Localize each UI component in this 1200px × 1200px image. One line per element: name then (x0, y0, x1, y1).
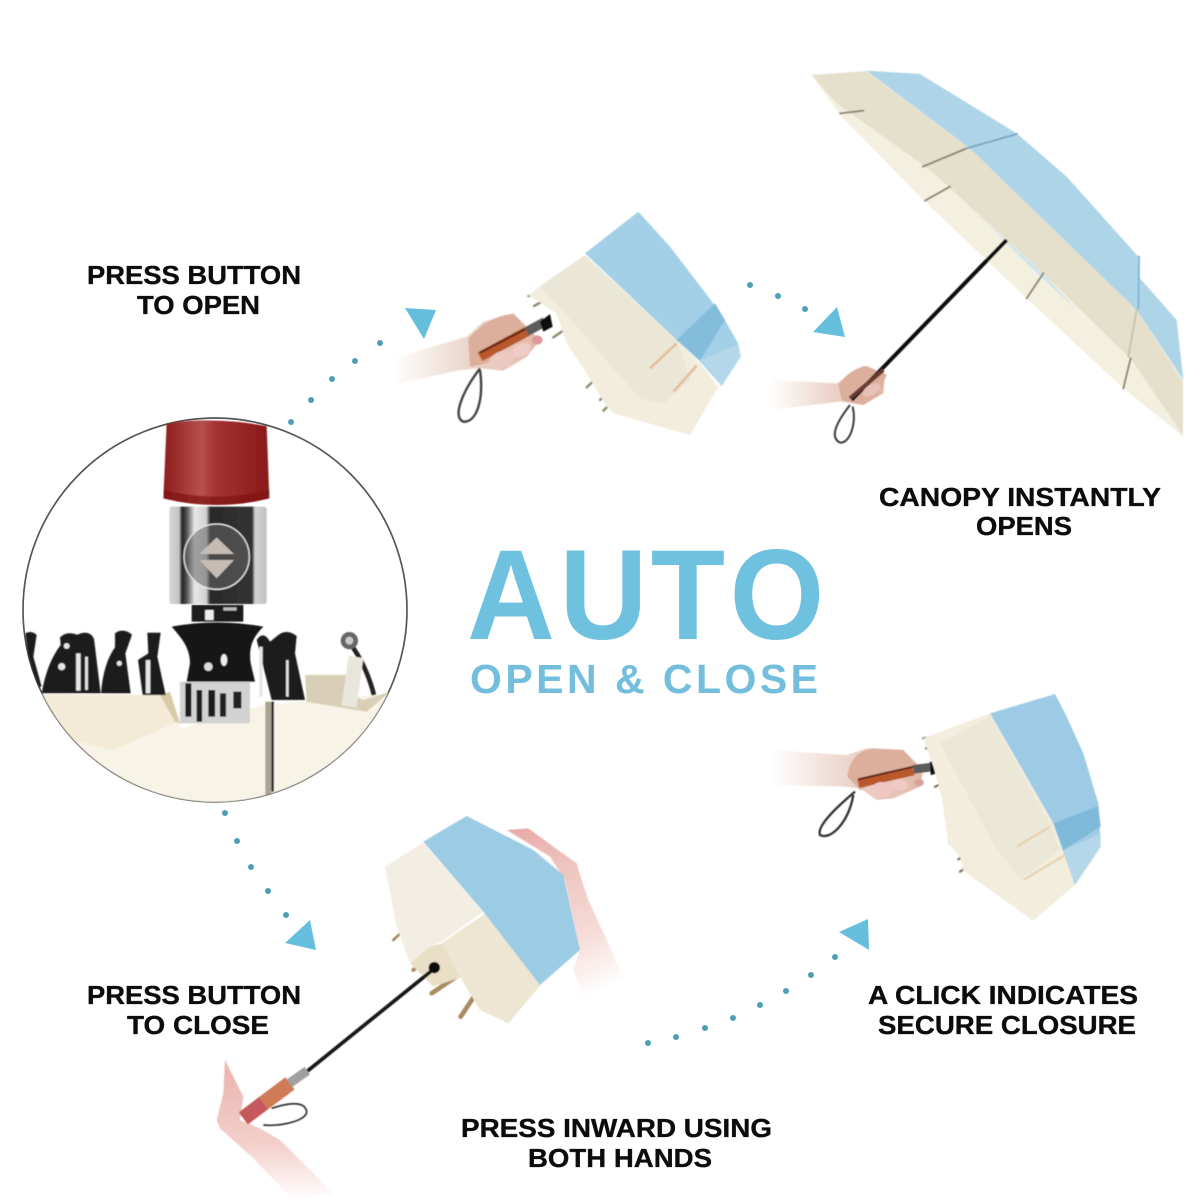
umbrella closing with both hands (217, 816, 627, 1200)
strap (459, 368, 481, 422)
metal button housing (169, 507, 267, 604)
fingers (871, 782, 892, 798)
arm and hand (770, 748, 923, 800)
dotted arrow: half-open to fully open (747, 282, 845, 337)
label: a click indicates secure closure: SECURE CLOSURE (878, 1010, 1136, 1040)
label: canopy instantly opens (879, 482, 1161, 541)
canopy cream (528, 255, 718, 435)
rib tips (528, 291, 617, 411)
canopy blue (423, 816, 580, 985)
canopy cream (923, 713, 1075, 921)
grip and fingers (850, 370, 883, 398)
left rib tips (25, 631, 305, 700)
dotted arrow: button to closing umbrella (222, 810, 316, 950)
arm and hand (393, 313, 540, 384)
label: a click indicates secure closure (868, 980, 1138, 1040)
label: press inward using both hands: PRESS INWARD USING (461, 1113, 772, 1143)
label: canopy instantly opens: CANOPY INSTANTLY (879, 482, 1161, 512)
canopy underside (410, 943, 463, 987)
rib seam (264, 701, 272, 796)
strap (820, 792, 855, 836)
ribs (393, 930, 478, 1017)
fingers (487, 347, 516, 371)
dotted arrow: button to half-open umbrella (288, 308, 436, 425)
circular close-up of handle and button (23, 418, 410, 810)
label: press button to open (87, 260, 301, 320)
black flared collar (172, 622, 263, 682)
label: canopy instantly opens: OPENS (976, 511, 1072, 541)
lens outline (23, 418, 407, 802)
red wooden handle (163, 420, 269, 505)
label: press button to close (87, 980, 301, 1040)
ribs (840, 111, 1139, 388)
canopy base (812, 72, 1183, 437)
cream canopy (42, 692, 388, 803)
dotted arrow: closing to secure closure (645, 919, 869, 1046)
heading: AUTO: AUTO (467, 524, 824, 667)
button (184, 524, 249, 589)
label: press button to close: TO CLOSE (127, 1010, 269, 1040)
fold lines (1017, 827, 1065, 880)
right rib (341, 632, 374, 707)
strap (835, 405, 854, 443)
canopy cream lower (442, 912, 541, 1023)
white rib highlights (58, 643, 289, 697)
half-open umbrella with hand (393, 212, 741, 435)
fully open umbrella with hand (770, 71, 1183, 443)
shaft (852, 240, 1007, 400)
fold lines (650, 343, 697, 392)
upper hand (507, 828, 627, 1018)
canopy cream upper (385, 843, 483, 963)
central mechanism (180, 682, 250, 723)
strap (263, 1104, 307, 1125)
arm and hand (770, 366, 885, 410)
canopy inner band (812, 71, 1183, 435)
subheading: OPEN & CLOSE: OPEN & CLOSE (470, 656, 818, 702)
handle (480, 332, 527, 357)
secure closure umbrella with hand (770, 694, 1101, 921)
blue band (867, 71, 1183, 380)
shaft (307, 967, 437, 1072)
handle (858, 771, 913, 783)
blue sliver under (957, 197, 1075, 308)
rib tips (923, 737, 982, 872)
handle (243, 1083, 290, 1118)
label: press inward using both hands: BOTH HANDS (528, 1143, 712, 1173)
lower hand (217, 1060, 333, 1200)
label: press button to close: PRESS BUTTON (87, 980, 301, 1010)
canopy blue (585, 212, 741, 386)
label: press inward using both hands (461, 1113, 772, 1173)
label: a click indicates secure closure: A CLICK INDICATES (868, 980, 1138, 1010)
label: press button to open: TO OPEN (137, 290, 260, 320)
canopy blue (990, 694, 1101, 885)
label: press button to open: PRESS BUTTON (87, 260, 301, 290)
